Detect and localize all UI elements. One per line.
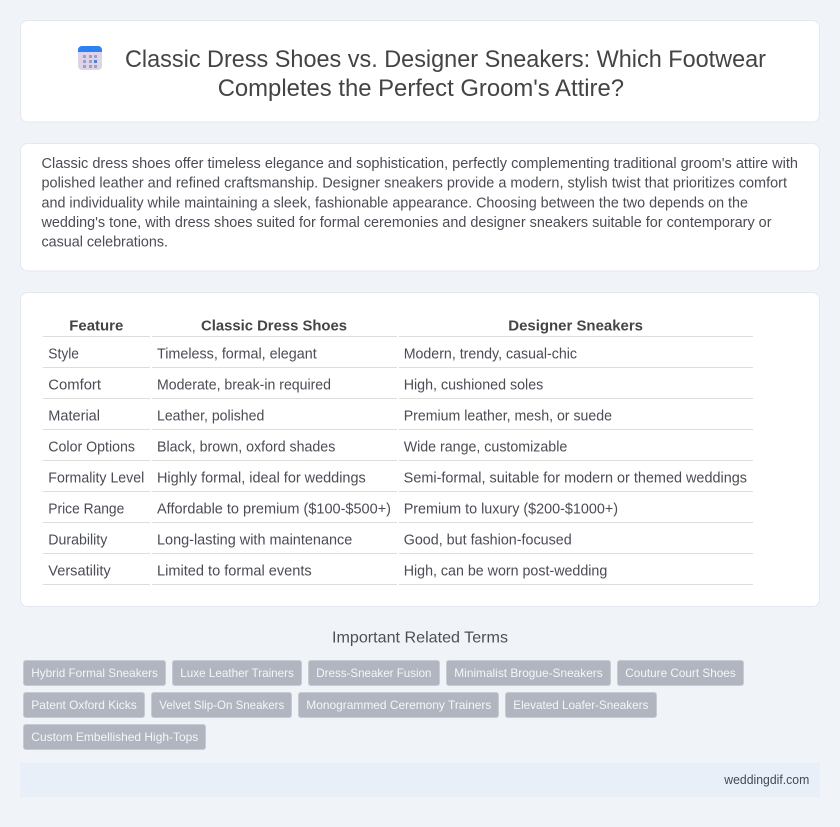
row: price range: Premium to luxury ($200-$1000+) xyxy=(404,501,618,517)
title: Classic Dress Shoes vs. Designer Sneakers: Which Footwear xyxy=(125,46,766,73)
row: durability: Good, but fashion-focused xyxy=(404,532,572,548)
row: durability: Long-lasting with maintenance xyxy=(157,532,352,548)
row: comfort: High, cushioned soles xyxy=(404,377,543,393)
row: price range xyxy=(48,501,618,517)
row: formality level: Semi-formal, suitable for modern or themed weddings xyxy=(404,470,747,486)
text block: description: casual celebrations. xyxy=(42,234,168,250)
row: material: Leather, polished xyxy=(157,408,264,424)
row: durability xyxy=(48,532,572,548)
table header xyxy=(69,319,643,335)
text block: description: and individuality while maintaining a sleek, fashionable appearance. Choosing between the two depends on the xyxy=(42,195,748,211)
tag xyxy=(24,660,166,686)
row: style: Style xyxy=(48,346,79,362)
text block: description: wedding's tone, with dress shoes suited for formal ceremonies and designer sneakers suitable for contemporary or xyxy=(40,215,772,231)
tag: Elevated Loafer-Sneakers xyxy=(513,698,648,712)
text block: description xyxy=(40,156,798,250)
row: versatility: Versatility xyxy=(48,563,112,579)
tag xyxy=(618,660,744,686)
row: formality level: Highly formal, ideal for weddings xyxy=(157,470,366,486)
tag xyxy=(24,724,206,750)
tag xyxy=(298,692,498,718)
table header: Classic Dress Shoes xyxy=(201,319,347,335)
tag: Monogrammed Ceremony Trainers xyxy=(306,698,491,712)
tag xyxy=(308,660,440,686)
row: material: Premium leather, mesh, or suede xyxy=(404,408,612,424)
row: style xyxy=(48,346,577,362)
tag xyxy=(506,692,656,718)
tag: Minimalist Brogue-Sneakers xyxy=(454,666,603,680)
row: style: Timeless, formal, elegant xyxy=(157,346,317,362)
row: formality level: Formality Level xyxy=(48,470,144,486)
tag: Velvet Slip-On Sneakers xyxy=(159,698,284,712)
tag: Hybrid Formal Sneakers xyxy=(31,666,158,680)
row: style: Modern, trendy, casual-chic xyxy=(404,346,577,362)
row: comfort: Comfort xyxy=(48,377,101,393)
table header: Feature xyxy=(69,319,123,335)
row: price range: Price Range xyxy=(48,501,124,517)
row: material: Material xyxy=(48,408,100,424)
row: price range: Affordable to premium ($100-$500+) xyxy=(157,501,391,517)
footer: weddingdif.com xyxy=(723,773,809,787)
tag: Patent Oxford Kicks xyxy=(31,698,137,712)
title: Completes the Perfect Groom's Attire? xyxy=(218,75,624,102)
row: versatility: High, can be worn post-wedding xyxy=(404,563,607,579)
table header: Designer Sneakers xyxy=(508,319,643,335)
row: durability: Durability xyxy=(48,532,108,548)
footer xyxy=(20,763,820,797)
panel: comparison table xyxy=(20,292,820,606)
row: formality level xyxy=(48,470,747,486)
icon: calendar xyxy=(78,46,102,70)
row: color options: Black, brown, oxford shades xyxy=(157,439,335,455)
tag xyxy=(446,660,610,686)
panel: header xyxy=(20,20,820,122)
row: versatility xyxy=(48,563,607,579)
tag: Dress-Sneaker Fusion xyxy=(316,666,432,680)
heading: related terms: Important Related Terms xyxy=(332,630,508,647)
tag: Custom Embellished High-Tops xyxy=(31,730,198,744)
related terms tags xyxy=(24,660,744,750)
tag: Couture Court Shoes xyxy=(625,666,736,680)
row: comfort: Moderate, break-in required xyxy=(157,377,331,393)
text block: description: polished leather and refined craftsmanship. Designer sneakers provide a modern, stylish twist that prioritizes comfort xyxy=(42,176,787,192)
tag xyxy=(152,692,292,718)
tag xyxy=(172,660,302,686)
title xyxy=(125,46,766,102)
row: versatility: Limited to formal events xyxy=(157,563,312,579)
tag xyxy=(24,692,144,718)
tag: Luxe Leather Trainers xyxy=(180,666,294,680)
row: color options xyxy=(48,439,567,455)
text block: description: Classic dress shoes offer timeless elegance and sophistication, perfectly complementing traditional groom's attire with xyxy=(42,156,798,172)
row: color options: Wide range, customizable xyxy=(404,439,567,455)
row: color options: Color Options xyxy=(48,439,135,455)
row: comfort xyxy=(48,377,543,393)
row: material xyxy=(48,408,612,424)
panel: introduction text xyxy=(20,144,820,271)
